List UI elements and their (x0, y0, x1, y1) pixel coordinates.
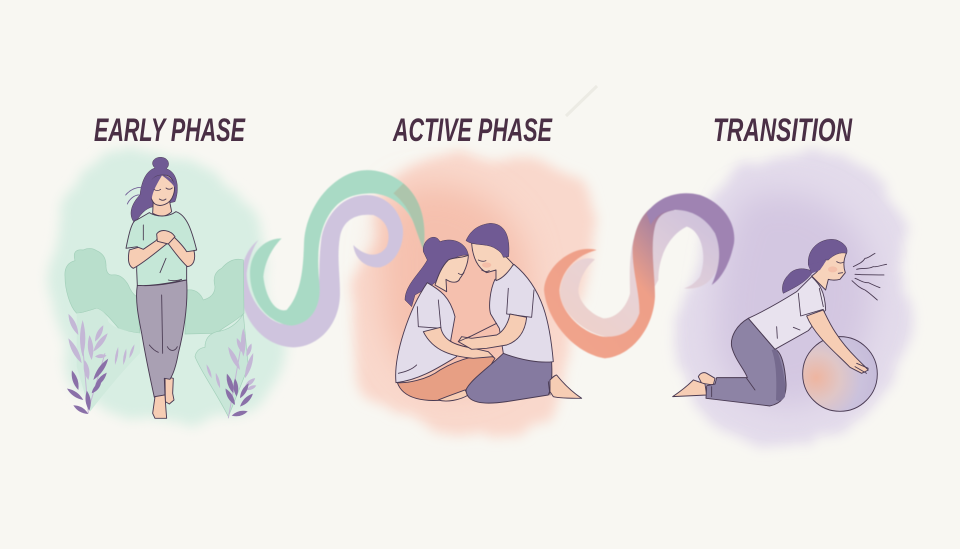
wash shading: transition (715, 192, 872, 406)
face (150, 175, 174, 205)
back foot (165, 377, 174, 404)
man neck and face (472, 243, 513, 281)
woman hair back (405, 237, 468, 307)
figure: woman kneeling on birth ball (673, 239, 887, 411)
man hair (466, 223, 509, 257)
figure: seated couple (396, 223, 582, 403)
arms (128, 233, 168, 268)
man shirt (490, 264, 553, 362)
woman arm (423, 327, 493, 358)
swirl: green and lilac connector (240, 170, 424, 347)
figure: woman walking with bushes and lavender (65, 157, 257, 418)
neck (153, 200, 172, 216)
back foot (698, 373, 715, 385)
woman face (435, 255, 468, 292)
hair back (131, 157, 177, 223)
front foot (153, 395, 167, 418)
hands (157, 231, 175, 244)
panel: early phase wash (52, 152, 282, 422)
breath lines (852, 253, 887, 300)
swirl: coral and purple connector (544, 193, 734, 358)
man arms (458, 314, 527, 349)
pants (137, 280, 187, 397)
woman shirt (396, 283, 457, 383)
front foot (673, 380, 707, 397)
hair fringe (147, 175, 177, 199)
man pants (466, 353, 552, 403)
man foot (550, 375, 582, 398)
neck and face (812, 252, 847, 290)
shirt (748, 277, 826, 349)
orange pants (397, 355, 495, 400)
panel: transition wash (676, 153, 909, 448)
shirt (126, 212, 197, 286)
hair (782, 239, 847, 293)
lavender left (66, 313, 136, 413)
arms (807, 310, 868, 373)
bushes (65, 248, 248, 417)
heading: active phase: ACTIVE PHASE (392, 112, 553, 148)
wash shading: active phase (380, 184, 530, 389)
heading: transition: TRANSITION (713, 112, 853, 148)
panel: active phase wash (352, 153, 592, 435)
birth ball (803, 337, 877, 411)
lavender right (205, 328, 257, 418)
heading: early phase: EARLY PHASE (94, 112, 246, 148)
pants (706, 318, 786, 406)
